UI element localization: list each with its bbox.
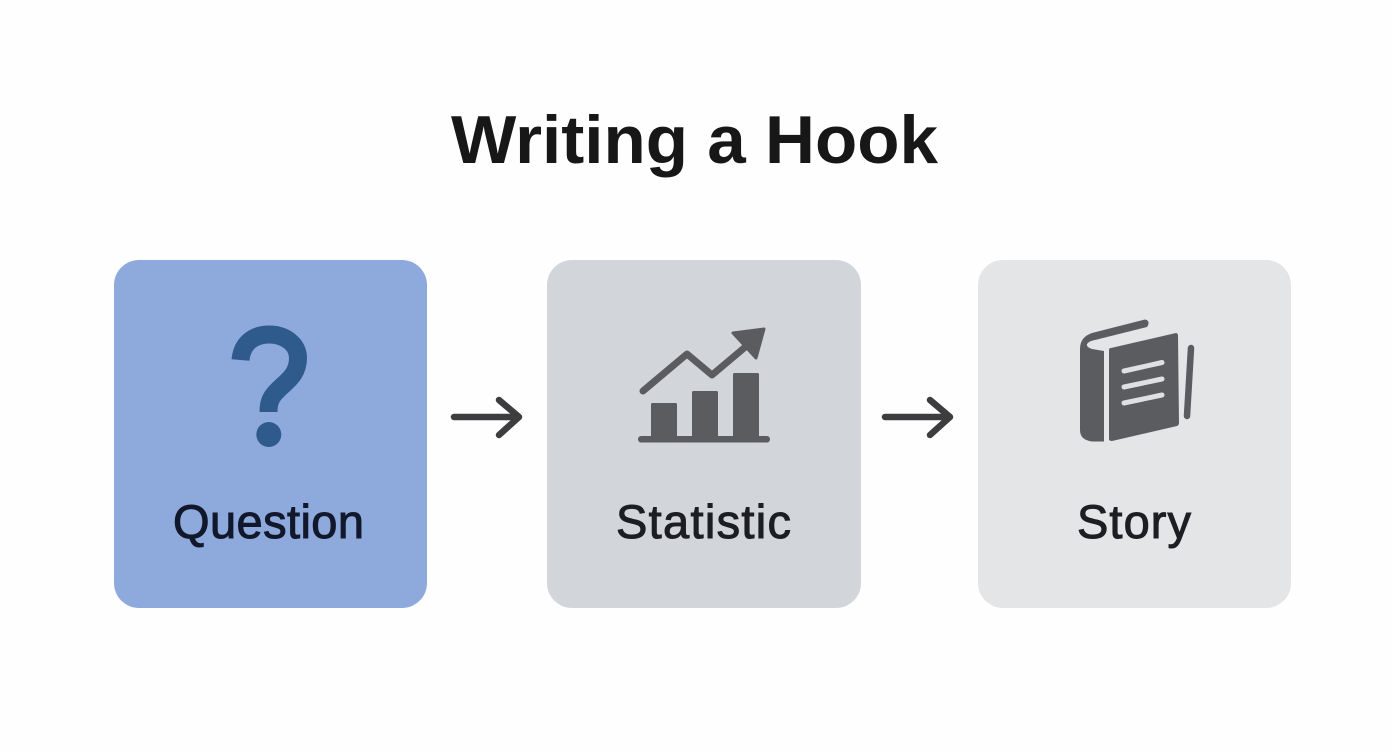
title: Writing a Hook [451, 102, 938, 178]
panel: story [978, 260, 1291, 608]
label: story: Story [1077, 495, 1192, 548]
label: statistic: Statistic [616, 495, 791, 548]
arrow: question to statistic [454, 400, 519, 435]
icon: rising bar chart [638, 329, 770, 442]
icon: question mark [240, 334, 298, 447]
label: question: Question [173, 495, 364, 548]
panel: statistic [547, 260, 861, 608]
arrow: statistic to story [885, 400, 950, 435]
panel: question [114, 260, 427, 608]
icon: book [1080, 320, 1191, 442]
